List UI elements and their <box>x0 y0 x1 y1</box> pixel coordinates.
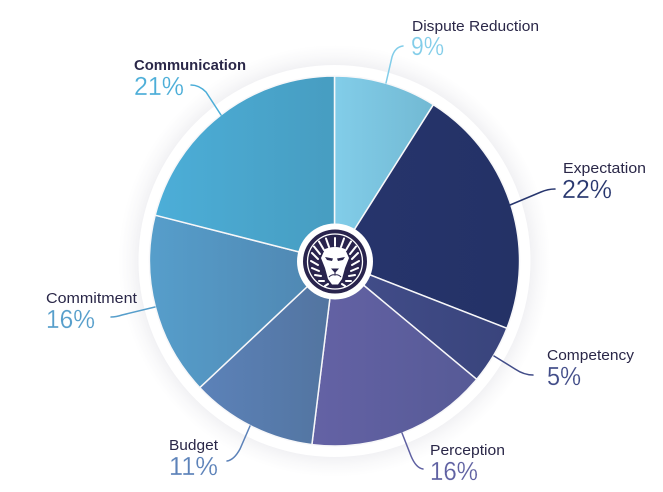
label: Competency <box>494 348 635 391</box>
label: Competency: 5% <box>547 363 581 391</box>
label: Dispute Reduction <box>386 19 539 83</box>
pie chart <box>149 76 520 446</box>
wedge: Commitment 16% <box>149 215 334 388</box>
label: Commitment: 16% <box>46 306 95 334</box>
wedge: Expectation 22% <box>334 105 520 328</box>
lion mane <box>311 238 359 286</box>
label: Competency: Competency <box>547 348 635 364</box>
label: Communication: 21% <box>134 73 184 101</box>
wedge: Perception 16% <box>312 261 477 446</box>
wedge: Communication 21% <box>155 76 334 261</box>
label: Dispute Reduction: 9% <box>411 33 444 61</box>
label: Perception: Perception <box>430 443 505 459</box>
label: Budget: 11% <box>169 453 218 481</box>
wedge: Budget 11% <box>200 261 334 445</box>
label: Expectation <box>510 161 646 205</box>
label: Perception <box>402 433 505 486</box>
label: Communication <box>134 58 246 115</box>
label: Commitment <box>46 291 155 334</box>
label: Dispute Reduction: Dispute Reduction <box>412 19 539 35</box>
label: Perception: 16% <box>430 458 478 486</box>
label: Expectation: Expectation <box>563 161 646 177</box>
wedge: Dispute Reduction 9% <box>334 76 433 261</box>
label: Expectation: 22% <box>562 176 612 204</box>
wedge: Competency 5% <box>334 261 507 379</box>
lion face <box>321 247 349 284</box>
label: Budget: Budget <box>169 438 218 454</box>
lion eyes, nose and muzzle <box>325 257 345 273</box>
label: Commitment: Commitment <box>46 291 137 307</box>
label: Communication: Communication <box>134 58 246 74</box>
icon: lion logo badge <box>297 224 373 300</box>
pie backing ring with shadow <box>118 45 550 477</box>
label: Budget <box>169 426 250 481</box>
